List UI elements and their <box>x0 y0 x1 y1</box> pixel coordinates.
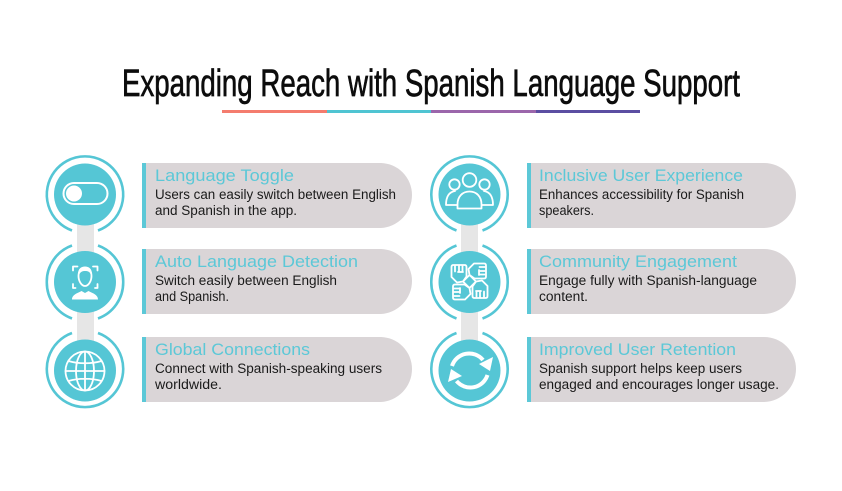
icon: joined hands <box>431 246 508 318</box>
text: auto language detection <box>155 273 337 304</box>
heading: auto language detection: Auto Language Detection <box>155 253 358 271</box>
heading: community engagement: Community Engagement <box>539 253 737 271</box>
heading: improved user retention: Improved User Retention <box>539 341 736 359</box>
text: auto language detection: and Spanish. <box>155 289 229 304</box>
icon: face recognition <box>47 246 123 318</box>
text: global connections <box>154 361 382 392</box>
text: inclusive user experience: speakers. <box>539 203 594 218</box>
text: community engagement: Engage fully with Spanish-language <box>539 273 757 288</box>
title underline <box>222 110 640 113</box>
text: improved user retention: engaged and encourages longer usage. <box>539 377 779 392</box>
heading: inclusive user experience: Inclusive User Experience <box>539 167 743 185</box>
panel: language toggle <box>142 163 412 228</box>
left column connectors <box>77 222 94 342</box>
heading: language toggle: Language Toggle <box>155 167 294 185</box>
heading: global connections: Global Connections <box>155 341 310 359</box>
text: community engagement: content. <box>539 289 588 304</box>
panel: improved user retention <box>527 337 796 402</box>
panel: auto language detection <box>142 249 412 314</box>
text: language toggle <box>155 187 396 218</box>
icon: toggle switch <box>47 156 123 230</box>
right column connectors <box>461 222 478 342</box>
text: language toggle: and Spanish in the app. <box>155 203 297 218</box>
text: improved user retention: Spanish support helps keep users <box>539 361 742 376</box>
icon: refresh arrows <box>431 333 508 407</box>
panel: community engagement <box>527 249 796 314</box>
text: inclusive user experience <box>539 187 744 218</box>
panel: global connections <box>142 337 412 402</box>
text: global connections: worldwide. <box>154 377 222 392</box>
icon: group of users <box>431 156 508 230</box>
icon: globe <box>47 333 123 407</box>
text: community engagement <box>539 273 757 304</box>
text: global connections: Connect with Spanish-speaking users <box>155 361 382 376</box>
text: language toggle: Users can easily switch between English <box>155 187 396 202</box>
text: inclusive user experience: Enhances accessibility for Spanish <box>539 187 744 202</box>
text: improved user retention <box>539 361 779 392</box>
text: auto language detection: Switch easily between English <box>155 273 337 288</box>
panel: inclusive user experience <box>527 163 796 228</box>
